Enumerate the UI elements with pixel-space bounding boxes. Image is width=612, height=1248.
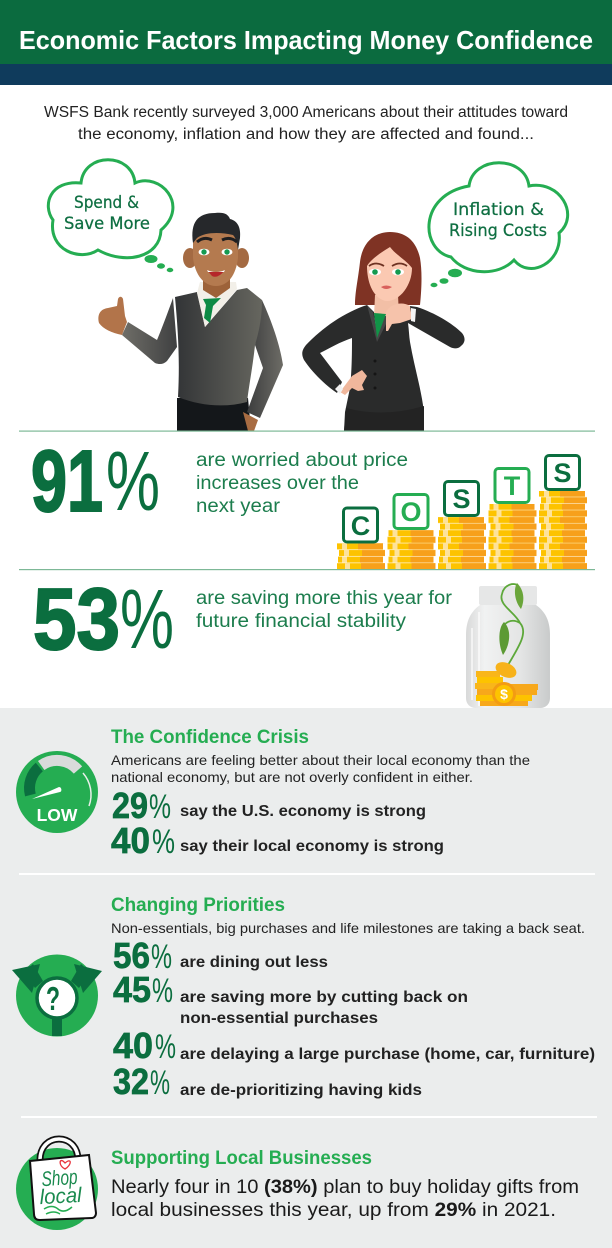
stat: 53 percent [33,571,453,668]
section: changing priorities: % [152,972,173,1010]
section: the confidence crisis: % [149,788,171,826]
stat: 53 percent: future financial stability [196,611,407,632]
divider [19,430,595,432]
thought bubble: spend and save more [48,160,173,272]
divider [19,873,595,875]
section: supporting local businesses: local businesses this year, up from 29% in 2021. [111,1200,556,1221]
header banner: Economic Factors Impacting Money Confidence [19,25,593,55]
stat: 91 percent: % [106,434,160,528]
section: changing priorities: % [155,1028,176,1066]
icon: crossroads question mark: ? [46,980,60,1017]
section: changing priorities: 56 [113,935,150,976]
illustration: woman giving thumbs down [302,232,465,431]
section: the confidence crisis: 29 [112,785,148,826]
section: changing priorities: 40 [113,1025,153,1066]
intro text: the economy, inflation and how they are affected and found... [78,126,534,143]
illustration: coin stacks spelling costs: O [400,497,422,527]
icon: shop local bag [16,1139,98,1230]
section: changing priorities: % [150,1064,170,1102]
illustration: coin stacks spelling costs [337,456,587,570]
icon: shop local bag: local [39,1184,84,1209]
stat: 91 percent: are worried about price [196,450,408,471]
section: changing priorities [111,895,595,1102]
icon: shop local bag: Shop [41,1166,78,1191]
illustration: man giving thumbs up [98,213,283,431]
stat: 53 percent: are saving more this year for [196,588,453,609]
section: the confidence crisis: 40 [111,820,150,861]
section: changing priorities: 45 [113,969,151,1010]
section: changing priorities: are dining out less [180,954,328,971]
section: supporting local businesses [111,1148,579,1221]
illustration: coin stacks spelling costs: C [351,511,370,541]
section: the confidence crisis: say their local economy is strong [180,838,444,855]
stat: 91 percent: next year [196,496,281,517]
section: changing priorities: are delaying a large purchase (home, car, furniture) [180,1046,595,1063]
section: the confidence crisis: say the U.S. economy is strong [180,803,426,820]
thought bubble: inflation and rising costs: Inflation & [453,200,544,220]
section: changing priorities: non-essential purchases [180,1010,378,1027]
illustration: jar with coins and sprout [466,583,550,708]
icon: low confidence gauge [16,751,98,833]
section: the confidence crisis: The Confidence Crisis [111,727,309,748]
stat: 91 percent [31,433,408,530]
section: changing priorities: Non-essentials, big purchases and life milestones are taking a back seat. [111,920,585,936]
intro text [44,104,568,143]
icon: low confidence gauge: LOW [37,805,78,825]
section: the confidence crisis [111,727,530,861]
section: changing priorities: are saving more by cutting back on [180,989,468,1006]
illustration: coin stacks spelling costs: T [504,471,521,501]
section: changing priorities: Changing Priorities [111,895,285,916]
thought bubble: inflation and rising costs: Rising Costs [449,221,547,241]
section: changing priorities: % [151,938,172,976]
section: the confidence crisis: Americans are feeling better about their local economy than the [111,752,530,768]
thought bubble: spend and save more: Spend & [74,193,139,213]
divider [19,569,595,570]
illustration: coin stacks spelling costs: S [553,458,572,488]
section: the confidence crisis: national economy, but are not overly confident in either. [111,769,473,785]
thought bubble: inflation and rising costs [429,163,568,287]
section: supporting local businesses: Nearly four in 10 (38%) plan to buy holiday gifts from [111,1177,579,1198]
gray lower panel [0,708,612,1248]
illustration: jar with coins and sprout: $ [500,686,508,702]
stat: 53 percent: 53 [33,571,120,668]
intro text: WSFS Bank recently surveyed 3,000 Americans about their attitudes toward [44,104,568,121]
section: changing priorities: are de-prioritizing having kids [180,1082,422,1099]
illustration: coin stacks spelling costs: S [452,484,471,514]
stat: 53 percent: % [120,572,174,666]
icon: crossroads question mark [12,954,102,1036]
header banner [0,0,612,85]
thought bubble: spend and save more: Save More [64,214,150,234]
section: the confidence crisis: % [152,823,175,861]
stat: 91 percent: 91 [31,433,103,530]
section: supporting local businesses: Supporting Local Businesses [111,1148,372,1169]
section: changing priorities: 32 [113,1061,149,1102]
stat: 91 percent: increases over the [196,473,359,494]
divider [21,1116,597,1118]
